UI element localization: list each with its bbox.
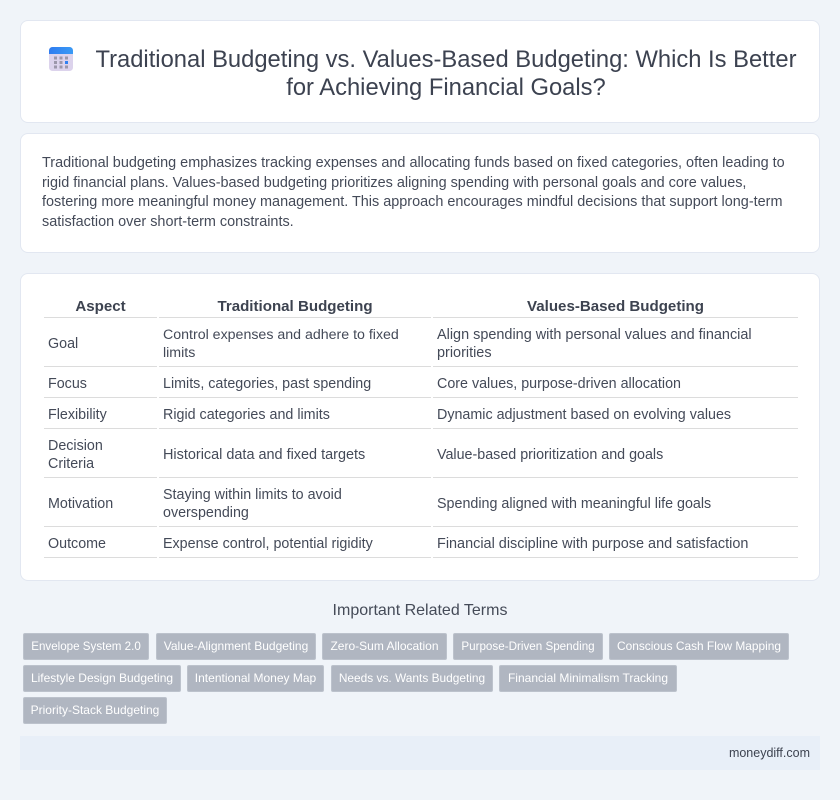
panel: introduction bbox=[20, 133, 820, 253]
table row: outcome: Expense control, potential rigidity bbox=[163, 536, 373, 552]
table row: motivation bbox=[48, 487, 711, 521]
table row: goal: Control expenses and adhere to fixed bbox=[163, 327, 399, 343]
text block: introduction: fostering more meaningful money management. This approach encourages mindful decisions that support long-term bbox=[42, 194, 782, 210]
tag: Value-Alignment Budgeting bbox=[164, 639, 308, 653]
table row: motivation: Motivation bbox=[48, 496, 113, 512]
tag bbox=[499, 665, 677, 692]
table header row: Aspect bbox=[75, 298, 126, 315]
tag: Priority-Stack Budgeting bbox=[31, 703, 159, 717]
table row: focus: Limits, categories, past spending bbox=[163, 376, 371, 392]
text block: introduction bbox=[42, 155, 785, 230]
table row: focus bbox=[48, 376, 681, 392]
tag bbox=[23, 697, 167, 724]
table header row bbox=[75, 298, 704, 315]
tag: Intentional Money Map bbox=[195, 671, 316, 685]
tag: Needs vs. Wants Budgeting bbox=[339, 671, 485, 685]
table row: flexibility: Rigid categories and limits bbox=[163, 407, 330, 423]
footer bbox=[20, 736, 820, 770]
table row: flexibility: Dynamic adjustment based on evolving values bbox=[437, 407, 731, 423]
tag bbox=[23, 665, 181, 692]
tag: Conscious Cash Flow Mapping bbox=[617, 639, 781, 653]
tag: Purpose-Driven Spending bbox=[461, 640, 595, 653]
panel: header bbox=[20, 20, 820, 123]
table row: decision criteria: Historical data and fixed targets bbox=[163, 447, 365, 463]
table row: outcome: Outcome bbox=[48, 536, 106, 552]
table row: flexibility bbox=[48, 407, 731, 423]
icon: calendar bbox=[49, 47, 73, 71]
table row: goal bbox=[48, 327, 752, 361]
table row: motivation: Staying within limits to avoid bbox=[163, 487, 342, 503]
table row: motivation: overspending bbox=[163, 505, 249, 521]
panel: comparison table bbox=[20, 273, 820, 581]
panel: related term tags bbox=[23, 633, 789, 724]
tag bbox=[609, 633, 789, 660]
tag: Financial Minimalism Tracking bbox=[508, 671, 668, 685]
text block: introduction: Traditional budgeting emphasizes tracking expenses and allocating funds based on fixed categories, often leading to bbox=[42, 155, 785, 171]
table row: motivation: Spending aligned with meaningful life goals bbox=[437, 496, 711, 512]
footer: source: moneydiff.com bbox=[729, 746, 810, 760]
table row: decision criteria: Criteria bbox=[48, 456, 94, 472]
table header row: Values-Based Budgeting bbox=[527, 298, 704, 315]
table row: decision criteria: Value-based prioritization and goals bbox=[437, 447, 663, 463]
table row: goal: Goal bbox=[48, 336, 78, 352]
table row: outcome: Financial discipline with purpose and satisfaction bbox=[437, 536, 748, 552]
table row: decision criteria: Decision bbox=[48, 438, 103, 454]
table row: goal: limits bbox=[163, 345, 195, 361]
table row: outcome bbox=[48, 536, 748, 552]
text block: introduction: satisfaction over short-term constraints. bbox=[42, 214, 294, 230]
title: for Achieving Financial Goals? bbox=[286, 74, 606, 101]
tag: Zero-Sum Allocation bbox=[330, 639, 439, 653]
heading: important related terms: Important Related Terms bbox=[333, 602, 507, 619]
tag bbox=[187, 665, 324, 692]
table row: focus: Core values, purpose-driven allocation bbox=[437, 376, 681, 392]
title: Traditional Budgeting vs. Values-Based Budgeting: Which Is Better bbox=[95, 46, 796, 73]
tag bbox=[322, 633, 447, 660]
tag bbox=[23, 633, 149, 660]
tag: Lifestyle Design Budgeting bbox=[31, 671, 173, 685]
title bbox=[95, 46, 796, 101]
tag bbox=[453, 633, 603, 660]
table row: focus: Focus bbox=[48, 376, 87, 392]
table row: goal: Align spending with personal values and financial bbox=[437, 327, 752, 343]
text block: introduction: rigid financial plans. Values-based budgeting prioritizes aligning spending with personal goals and core values, bbox=[42, 174, 746, 190]
tag bbox=[156, 633, 316, 660]
table header row: Traditional Budgeting bbox=[217, 298, 373, 315]
tag: Envelope System 2.0 bbox=[31, 640, 141, 653]
table row: decision criteria bbox=[48, 438, 663, 472]
tag bbox=[331, 665, 493, 692]
table row: goal: priorities bbox=[437, 345, 492, 361]
table row: flexibility: Flexibility bbox=[48, 407, 107, 423]
